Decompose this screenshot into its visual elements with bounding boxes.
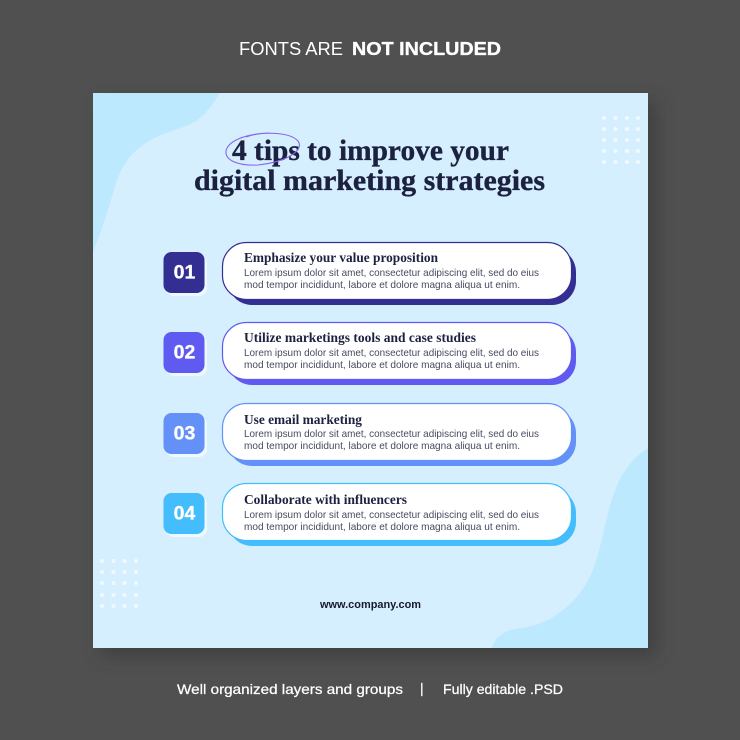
pill text 4	[244, 492, 539, 533]
dots: top right	[602, 116, 640, 164]
pill text 1: mod tempor incididunt, labore et dolore magna aliqua ut enim.	[244, 280, 520, 291]
header text: NOT INCLUDED	[352, 39, 501, 59]
tip 4	[164, 484, 576, 546]
pill text 3: Lorem ipsum dolor sit amet, consectetur adipiscing elit, sed do eius	[244, 429, 539, 440]
pill 3	[222, 404, 576, 466]
panel: card	[93, 93, 648, 648]
pill text 1: Emphasize your value proposition	[244, 250, 438, 265]
pill text 3: mod tempor incididunt, labore et dolore magna aliqua ut enim.	[244, 441, 520, 452]
number badge 03: 03	[174, 422, 195, 444]
pill 2	[222, 322, 576, 385]
pill text 3: Use email marketing	[244, 412, 362, 427]
tip 1	[164, 242, 576, 305]
number badge 02	[164, 332, 207, 376]
top-left blob	[93, 93, 220, 252]
number badge 01	[164, 252, 207, 296]
footer text: |	[420, 680, 424, 696]
pill text 2: Utilize marketings tools and case studies	[244, 330, 476, 345]
number badge 02: 02	[174, 342, 195, 364]
pill text 1	[244, 250, 539, 291]
number badge 04	[164, 493, 207, 537]
title: digital marketing strategies	[194, 164, 545, 197]
dots: bottom left	[100, 559, 138, 608]
header text	[239, 39, 501, 59]
pill text 2: Lorem ipsum dolor sit amet, consectetur adipiscing elit, sed do eius	[244, 348, 539, 359]
pill 4	[222, 484, 576, 546]
pill text 4: mod tempor incididunt, labore et dolore magna aliqua ut enim.	[244, 522, 520, 533]
number badge 03	[164, 413, 207, 457]
tip 2	[164, 322, 576, 385]
number badge 04: 04	[174, 502, 195, 524]
title: 4 tips to improve your	[232, 134, 509, 167]
icon: hand-drawn circle around 4 tips	[226, 133, 299, 165]
pill text 4: Collaborate with influencers	[244, 492, 407, 507]
footer text	[177, 680, 563, 697]
card shadow	[101, 101, 656, 656]
footer text: Well organized layers and groups	[177, 681, 403, 697]
header text: FONTS ARE	[239, 39, 343, 59]
pill text 2: mod tempor incididunt, labore et dolore magna aliqua ut enim.	[244, 360, 520, 371]
pill text 3	[244, 412, 539, 452]
tip 3	[164, 404, 576, 466]
website url: www.company.com	[319, 599, 421, 611]
bottom-right blob	[492, 448, 648, 648]
title	[194, 134, 545, 197]
pill 1	[222, 242, 576, 305]
pill text 2	[244, 330, 539, 371]
pill text 1: Lorem ipsum dolor sit amet, consectetur adipiscing elit, sed do eius	[244, 268, 539, 279]
pill text 4: Lorem ipsum dolor sit amet, consectetur adipiscing elit, sed do eius	[244, 510, 539, 521]
number badge 01: 01	[174, 262, 195, 284]
footer text: Fully editable .PSD	[443, 681, 563, 697]
